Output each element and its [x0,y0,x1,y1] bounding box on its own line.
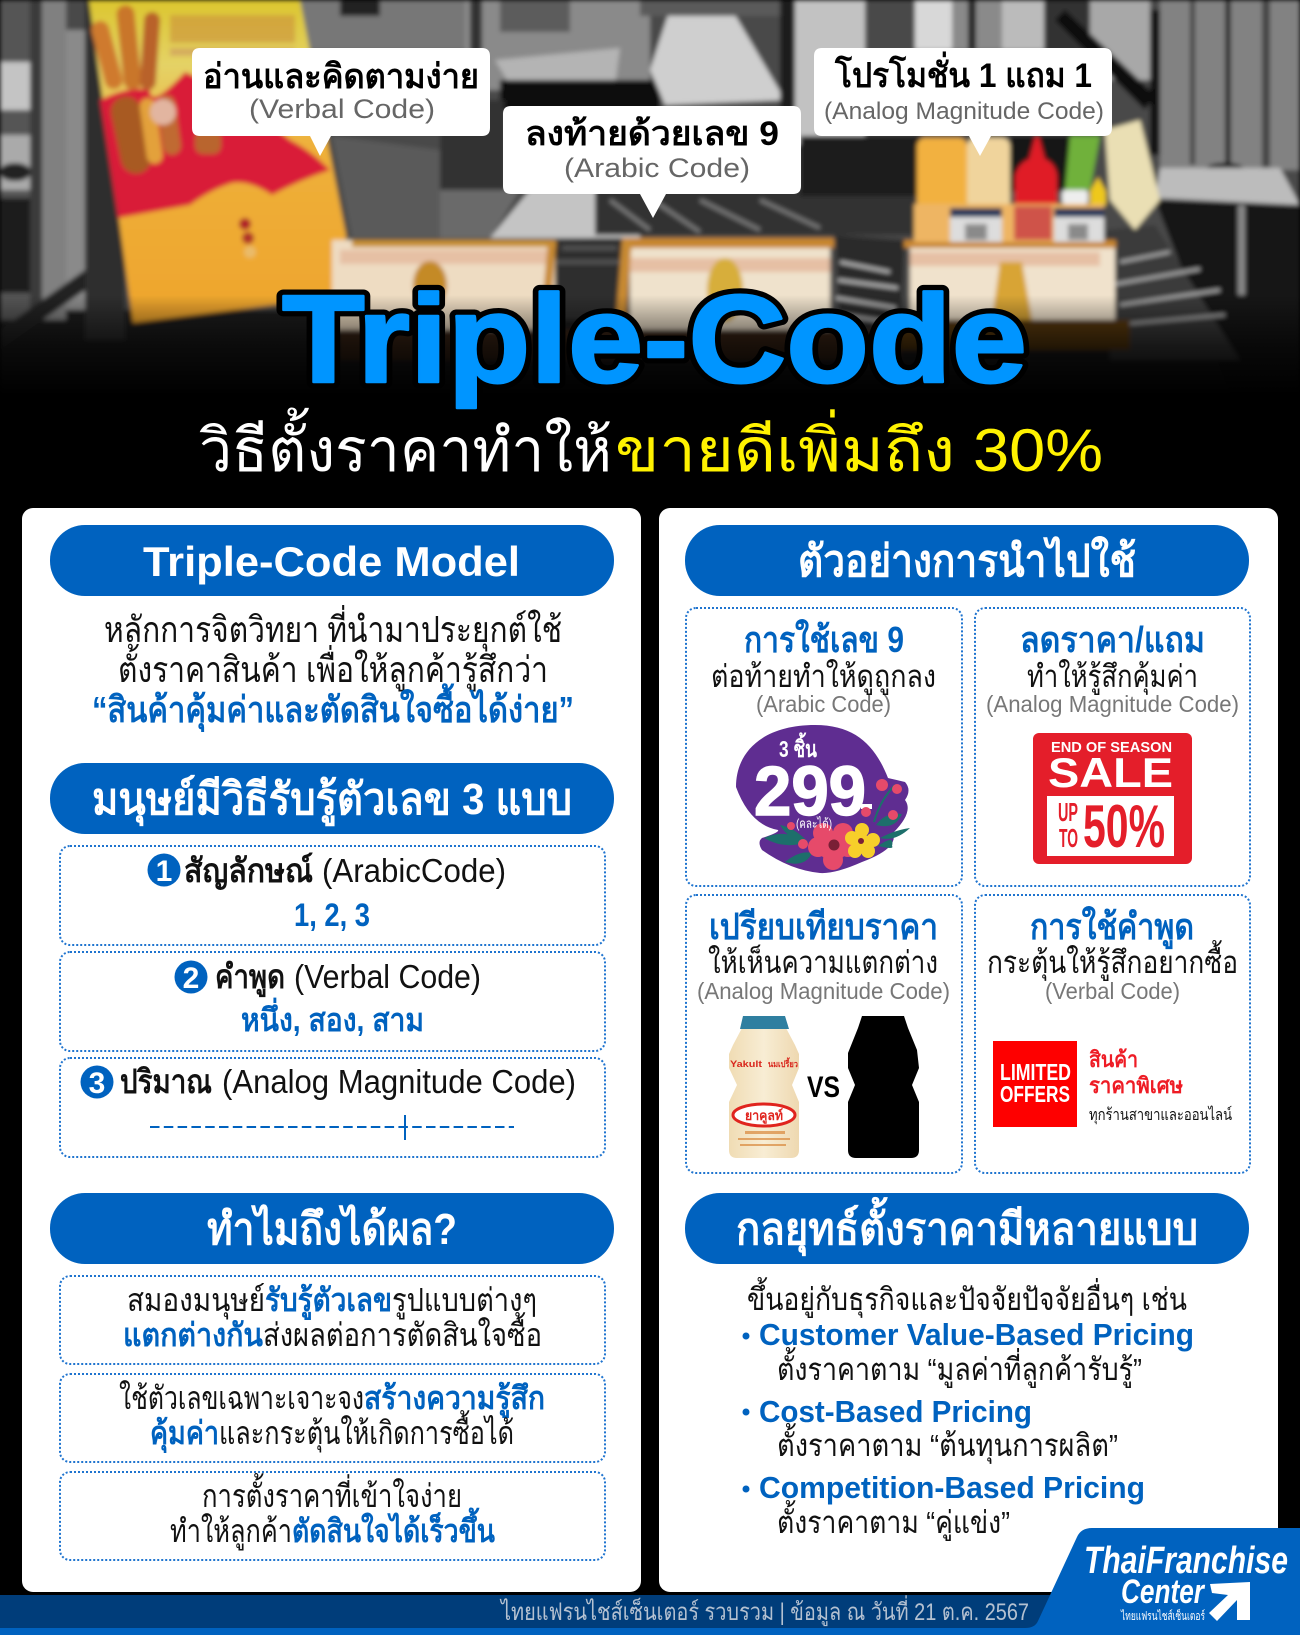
box: reason 3: ตัดสินใจได้เร็วขึ้น [292,1507,495,1549]
card: number 9: การใช้เลข 9 [744,618,904,660]
callout: arabic code: ลงท้ายด้วยเลข 9 [525,115,779,153]
icon: 299 price tag with flowers: 299 [754,752,866,830]
card: discount: ลดราคา/แถม [1020,619,1205,660]
box: arabic code: 1, 2, 3 [294,897,370,933]
box: arabic code: (ArabicCode) [322,852,506,889]
icon: number 3 [80,1066,114,1100]
icon: sale badge: UP [1058,797,1078,827]
icon: arrow [1209,1582,1250,1621]
icon: yakult bottle [729,1016,799,1158]
icon: 299 price tag with flowers: 3 ชิ้น [779,732,817,762]
title: Triple-Code [282,270,1027,409]
card: discount: ทำให้รู้สึกคุ้มค่า [1027,659,1198,696]
trays [332,240,555,330]
box: verbal code: หนึ่ง, สอง, สาม [241,997,424,1038]
label: VS: VS [807,1071,840,1104]
heading: Triple-Code Model [50,525,614,596]
card: wording: กระตุ้นให้รู้สึกอยากซื้อ [987,940,1238,982]
logo: ThaiFranchise Center: Center [1121,1573,1205,1611]
card: discount [975,608,1250,886]
icon: number 2: 2 [183,962,199,995]
icon: limited offers: ทุกร้านสาขาและออนไลน์ [1089,1105,1232,1125]
card: compare prices: เปรียบเทียบราคา [709,906,938,947]
card: compare prices [686,895,962,1173]
box: reason 2: และกระตุ้นให้เกิดการซื้อได้ [219,1410,514,1453]
text block: pricing strategies: Cost-Based Pricing [759,1394,1032,1429]
subtitle: วิธีตั้งราคาทำให้ [199,407,612,484]
text block: pricing strategies: ตั้งราคาตาม “คู่แข่ง” [777,1500,1010,1541]
header photo: food stall [0,0,1300,434]
icon: number 1: 1 [156,855,172,888]
callout: analog magnitude code: (Analog Magnitude Code) [824,98,1104,125]
heading: many pricing strategies: กลยุทธ์ตั้งราคามีหลายแบบ [736,1196,1198,1257]
box: reason 1: ส่งผลต่อการตัดสินใจซื้อ [263,1312,542,1353]
text block: model description [92,605,574,733]
icon: sale badge [1033,733,1192,864]
box: reason 1: รูปแบบต่างๆ [392,1282,537,1320]
icon: sale badge: TO [1059,823,1078,853]
text block: pricing strategies: ขึ้นอยู่กับธุรกิจและปัจจัยปัจจัยอื่นๆ เช่น [747,1277,1187,1319]
card: wording [975,895,1250,1173]
icon: sale badge: END OF SEASON [1051,739,1172,756]
box: reason 2: สร้างความรู้สึก [364,1380,545,1419]
box: analog magnitude code: (Analog Magnitude Code) [222,1063,576,1100]
heading: why it works [50,1193,614,1264]
box: reason 3: ทำให้ลูกค้า [170,1513,292,1551]
box: reason 2: ใช้ตัวเลขเฉพาะเจาะจง [119,1380,364,1416]
text block: pricing strategies: Competition-Based Pricing [759,1470,1145,1505]
box: reason 1: แตกต่างกัน [123,1317,263,1353]
footer bar: ไทยแฟรนไชส์เซ็นเตอร์ รวบรวม | ข้อมูล ณ วันที่ 21 ต.ค. 2567 [499,1595,1029,1627]
icon: limited offers: OFFERS [1000,1081,1070,1107]
text block: pricing strategies: Customer Value-Based Pricing [759,1317,1194,1352]
card: number 9: (Arabic Code) [756,691,891,717]
card: discount: (Analog Magnitude Code) [986,691,1239,717]
icon: sale badge: SALE [1048,749,1173,796]
panel: left [22,508,641,1592]
box: reason 1: สมองมนุษย์ [127,1282,265,1320]
callout: arabic code [503,106,801,218]
box: arabic code [60,846,605,945]
heading: application examples [685,525,1249,596]
box: analog magnitude code [60,1058,605,1157]
callout: verbal code: อ่านและคิดตามง่าย [203,58,479,96]
number line [150,1115,514,1140]
callout: analog magnitude code: โปรโมชั่น 1 แถม 1 [834,51,1092,95]
text block: pricing strategies: ตั้งราคาตาม “มูลค่าที่ลูกค้ารับรู้” [777,1347,1142,1388]
icon: limited offers: LIMITED [1000,1059,1071,1085]
box: reason 2: คุ้มค่า [150,1415,219,1454]
icon: yakult bottle: Yakult [730,1059,762,1069]
card: compare prices: ให้เห็นความแตกต่าง [708,944,938,980]
box: reason 3 [60,1472,605,1560]
icon: sale badge: 50% [1083,793,1165,860]
subtitle: ขายดีเพิ่มถึง 30% [615,409,1103,484]
box: verbal code [60,952,605,1051]
text block: model description: “สินค้าคุ้มค่าและตัดสินใจซื้อได้ง่าย” [92,683,574,733]
title: Triple-Code [282,270,1027,409]
subtitle [199,407,1103,484]
card: wording: (Verbal Code) [1045,978,1180,1004]
box: reason 1: รับรู้ตัวเลข [265,1282,392,1321]
heading: why it works: ทำไมถึงได้ผล? [207,1203,457,1254]
icon: limited offers: ราคาพิเศษ [1089,1073,1183,1098]
card: number 9 [686,608,962,886]
text block: model description: ตั้งราคาสินค้า เพื่อให้ลูกค้ารู้สึกว่า [118,643,548,692]
box: reason 3: การตั้งราคาที่เข้าใจง่าย [202,1473,462,1514]
sign [89,0,348,323]
box: verbal code: (Verbal Code) [294,958,481,995]
heading: many pricing strategies [685,1193,1249,1264]
card: compare prices: (Analog Magnitude Code) [697,978,950,1004]
icon: number 1 [148,854,180,888]
heading: Triple-Code Model: Triple-Code Model [143,538,520,585]
logo: ThaiFranchise Center [0,1528,1300,1635]
icon: number 3: 3 [89,1067,105,1100]
callout: verbal code: (Verbal Code) [249,94,435,124]
icon: 299 price tag with flowers [736,725,910,873]
logo: ThaiFranchise Center: ไทยแฟรนไชส์เซ็นเตอร์ [1120,1608,1205,1623]
box: reason 2 [60,1374,605,1462]
bottles and holder [917,138,967,210]
icon: 299 price tag with flowers: (คละได้) [796,816,832,831]
heading: application examples: ตัวอย่างการนำไปใช้ [798,535,1136,586]
callout: arabic code: (Arabic Code) [564,153,750,183]
icon: limited offers: สินค้า [1089,1047,1138,1072]
box: verbal code: คำพูด [215,958,285,998]
text block: model description: หลักการจิตวิทยา ที่นำมาประยุกต์ใช้ [104,605,562,652]
text block: pricing strategies: ตั้งราคาตาม “ต้นทุนการผลิต” [777,1423,1118,1465]
text block: pricing strategies [742,1277,1194,1541]
icon: number 2 [174,960,208,995]
callout: analog magnitude code [814,48,1112,156]
box: analog magnitude code: ปริมาณ [120,1063,212,1100]
box: reason 1 [60,1276,605,1364]
callout: verbal code [192,48,490,156]
heading: three ways of perceiving numbers: มนุษย์มีวิธีรับรู้ตัวเลข 3 แบบ [92,774,572,827]
icon: limited offers [993,1041,1232,1127]
icon: yakult bottle: นมเปรี้ยว [768,1057,798,1069]
heading: three ways of perceiving numbers [50,763,614,834]
footer bar [0,1595,1060,1635]
box: arabic code: สัญลักษณ์ [184,852,313,890]
panel: right [659,508,1278,1592]
icon: black bottle [848,1016,919,1158]
card: wording: การใช้คำพูด [1030,905,1194,950]
icon: yakult bottle: ยาคูลท์ [745,1108,783,1124]
card: number 9: ต่อท้ายทำให้ดูถูกลง [711,659,936,695]
